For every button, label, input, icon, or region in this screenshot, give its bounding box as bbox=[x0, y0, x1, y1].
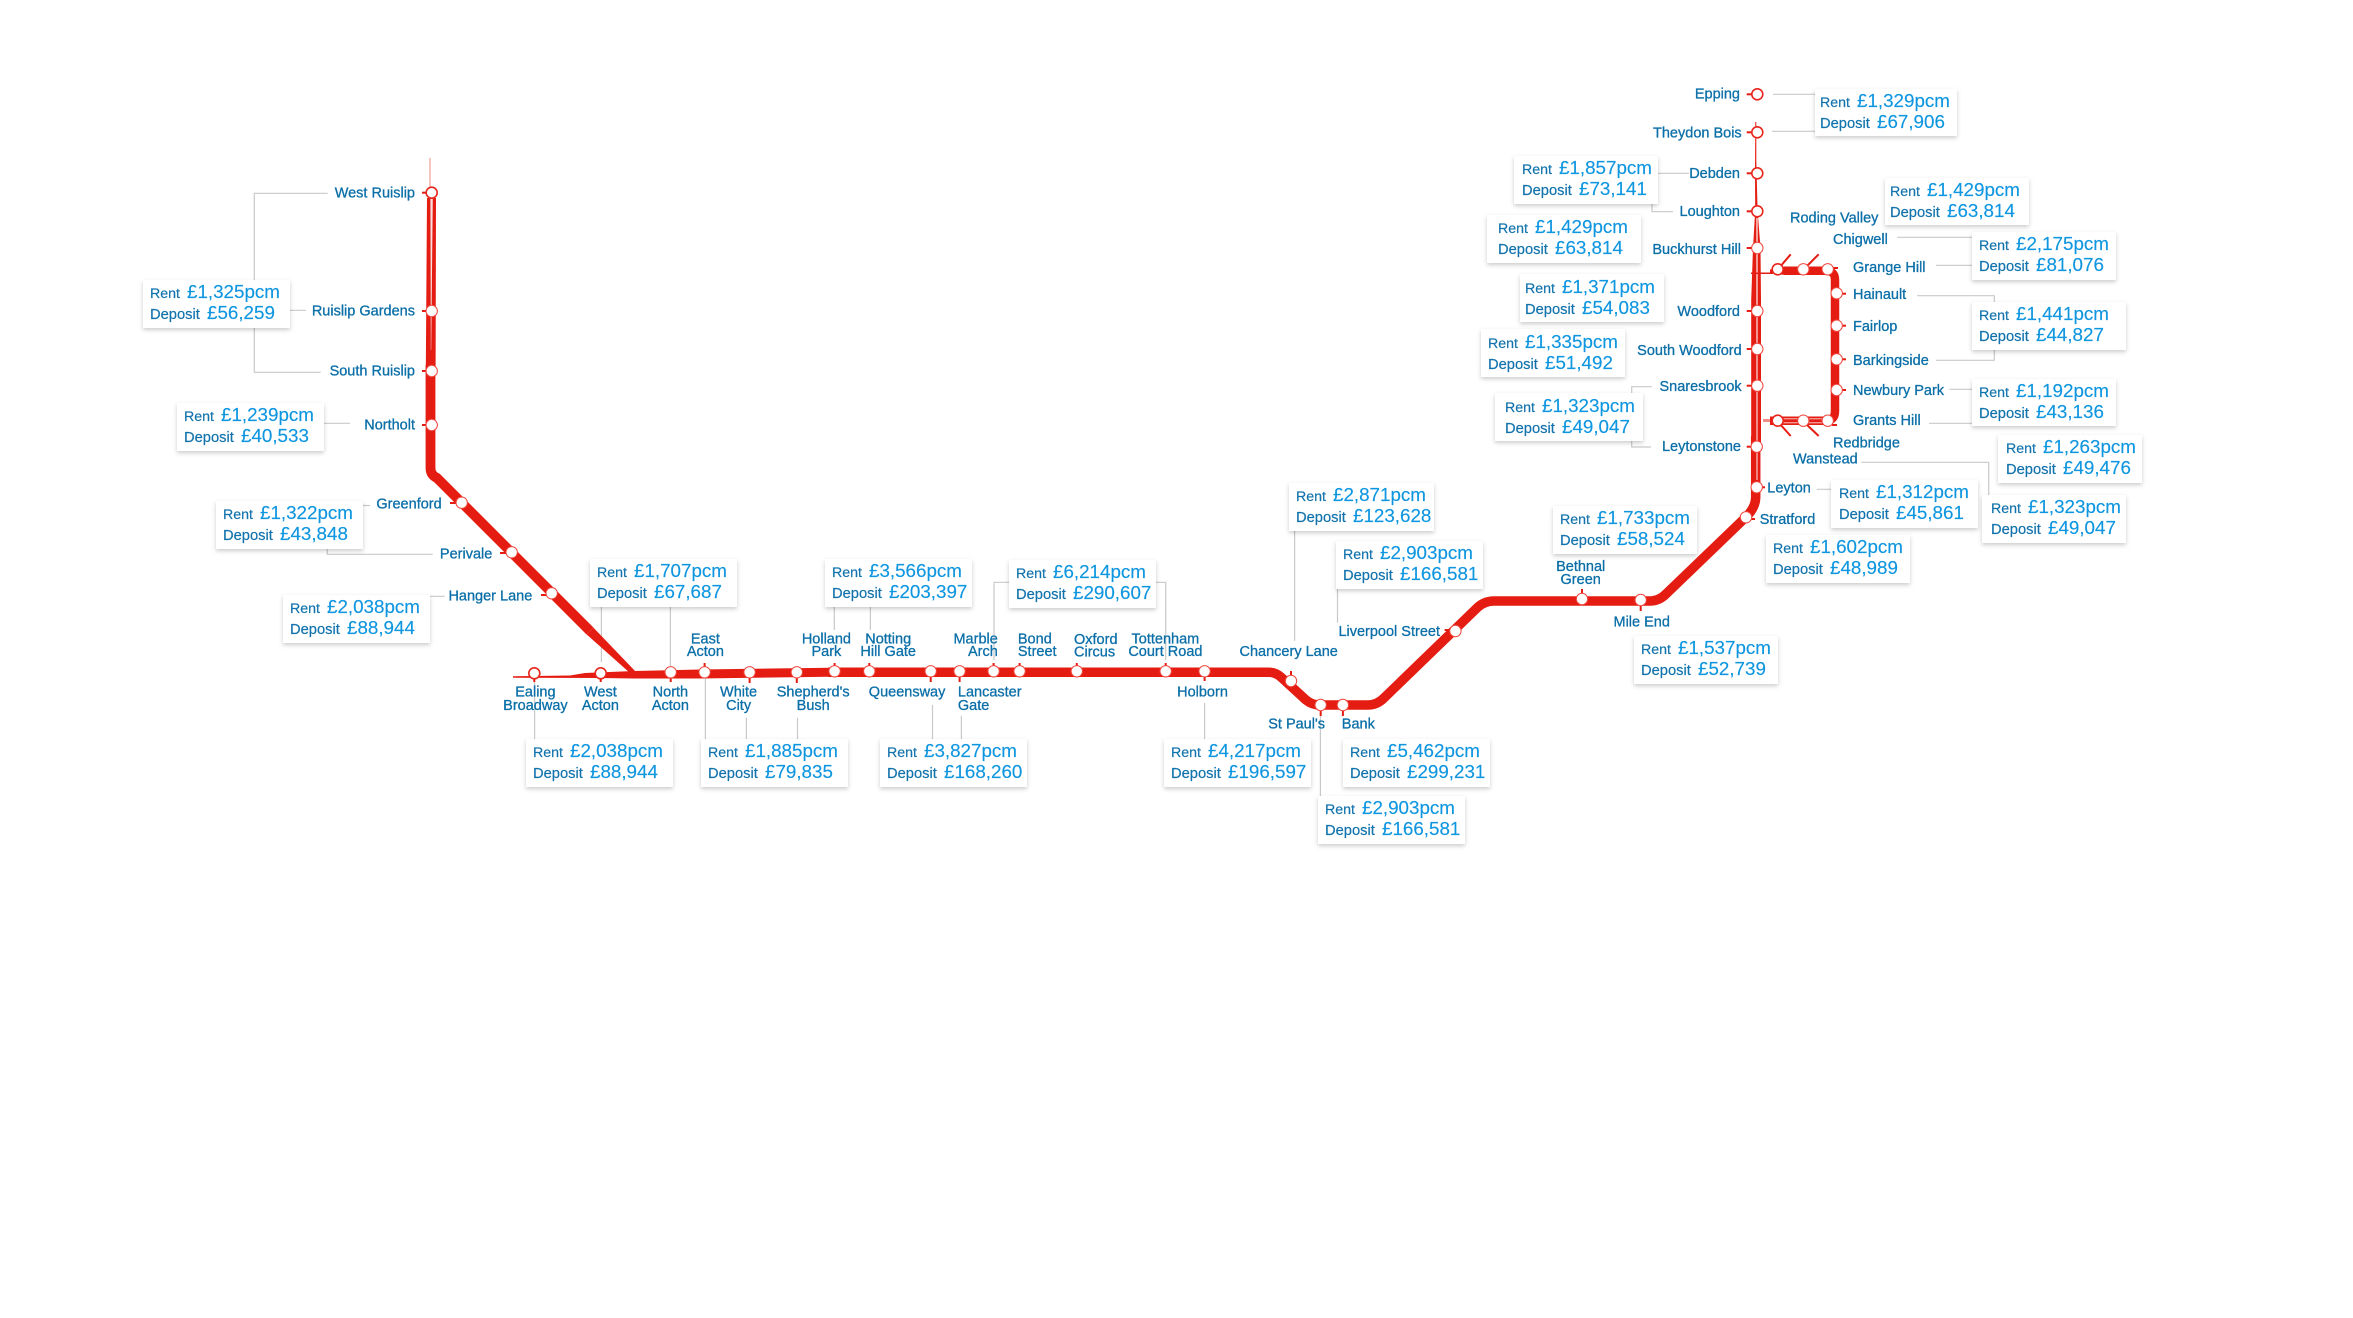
station: White City: City bbox=[726, 698, 752, 714]
station: Ealing Broadway: Ealing bbox=[515, 685, 556, 701]
card: Chancery Lane: £123,628 bbox=[1353, 505, 1431, 526]
card: Newbury Park and Grants Hill: £43,136 bbox=[2036, 401, 2104, 422]
card: Bank: £5,462pcm bbox=[1387, 740, 1480, 761]
card: Stratford bbox=[1766, 535, 1910, 583]
card: Bank bbox=[1343, 739, 1490, 787]
stations: west branch bbox=[312, 185, 557, 604]
station: Chigwell: Chigwell bbox=[1833, 232, 1888, 248]
station: Debden: Debden bbox=[1689, 166, 1740, 182]
card: Marble Arch to Tottenham Court Road: £6,214pcm bbox=[1053, 561, 1146, 582]
station: Marble Arch: Arch bbox=[968, 644, 998, 660]
station: Perivale: Perivale bbox=[440, 546, 492, 562]
card: Ealing Broadway bbox=[526, 739, 673, 787]
station: West Acton: West bbox=[584, 685, 617, 701]
station: Roding Valley bbox=[1772, 211, 1879, 275]
station: Holborn: Holborn bbox=[1177, 685, 1228, 701]
card: Ealing Broadway: £2,038pcm bbox=[570, 740, 663, 761]
station: Bank bbox=[1337, 699, 1376, 732]
card: Chancery Lane bbox=[1289, 483, 1434, 531]
card: Redbridge: £1,263pcm bbox=[2043, 436, 2136, 457]
station: Snaresbrook: Snaresbrook bbox=[1659, 379, 1742, 395]
card: Snaresbrook and Leytonstone: £1,323pcm bbox=[1542, 395, 1635, 416]
card: Bank: Deposit bbox=[1350, 766, 1400, 782]
card: Greenford and Perivale: Rent bbox=[223, 507, 253, 523]
card: Hanger Lane bbox=[283, 595, 430, 643]
card: Redbridge bbox=[1998, 435, 2142, 483]
card: Mile End: Deposit bbox=[1641, 663, 1691, 679]
card: West and North Acton: Rent bbox=[597, 565, 627, 581]
card: Epping and Theydon Bois bbox=[1815, 89, 1957, 136]
card: East Acton, White City, Shepherd's Bush: Rent bbox=[708, 745, 738, 761]
station: South Ruislip: South Ruislip bbox=[330, 363, 415, 379]
card: Newbury Park and Grants Hill bbox=[1972, 379, 2116, 426]
card: Northolt: Rent bbox=[184, 409, 214, 425]
price cards bbox=[143, 89, 2142, 844]
station: Woodford: Woodford bbox=[1677, 304, 1740, 320]
card: Leyton: £45,861 bbox=[1896, 502, 1964, 523]
station: Bank: Bank bbox=[1342, 716, 1376, 732]
station: White City: White bbox=[720, 685, 757, 701]
card: Queensway and Lancaster Gate: Deposit bbox=[887, 766, 937, 782]
station: Theydon Bois: Theydon Bois bbox=[1653, 126, 1742, 142]
central line route bbox=[426, 122, 1835, 705]
card: Northolt: £1,239pcm bbox=[221, 404, 314, 425]
station: West Ruislip: West Ruislip bbox=[335, 185, 415, 201]
card: South Woodford: Deposit bbox=[1488, 357, 1538, 373]
station: Bethnal Green: Green bbox=[1561, 572, 1601, 588]
card: East Acton, White City, Shepherd's Bush: £1,885pcm bbox=[745, 740, 838, 761]
card: Buckhurst Hill: £63,814 bbox=[1555, 237, 1623, 258]
card: Epping and Theydon Bois: Deposit bbox=[1820, 116, 1870, 132]
station: Chancery Lane bbox=[1240, 644, 1338, 687]
card: South Woodford: £1,335pcm bbox=[1525, 331, 1618, 352]
card: West and North Acton: Deposit bbox=[597, 586, 647, 602]
station: Chancery Lane: Chancery Lane bbox=[1240, 644, 1338, 660]
station: Leyton: Leyton bbox=[1767, 481, 1811, 497]
card: Wanstead: £1,323pcm bbox=[2028, 496, 2121, 517]
card: Bethnal Green bbox=[1553, 506, 1697, 554]
station: West Acton bbox=[582, 668, 619, 714]
card: St Paul's: £2,903pcm bbox=[1362, 797, 1455, 818]
card: Greenford and Perivale: £1,322pcm bbox=[260, 502, 353, 523]
card: Roding Valley: Deposit bbox=[1890, 205, 1940, 221]
station: Ealing Broadway: Broadway bbox=[503, 698, 568, 714]
card: Wanstead: Deposit bbox=[1991, 522, 2041, 538]
station: Liverpool Street: Liverpool Street bbox=[1338, 624, 1440, 640]
west ruislip branch bbox=[426, 158, 637, 673]
station: Shepherd's Bush: Bush bbox=[797, 698, 830, 714]
card: Mile End: £52,739 bbox=[1698, 658, 1766, 679]
station: Wanstead: Wanstead bbox=[1793, 452, 1858, 468]
station: Epping bbox=[1695, 86, 1763, 102]
card: Holland Park and Notting Hill Gate: £203,397 bbox=[889, 581, 967, 602]
station: Notting Hill Gate bbox=[860, 631, 916, 677]
card: Marble Arch to Tottenham Court Road: Rent bbox=[1016, 566, 1046, 582]
card: Debden and Loughton: £73,141 bbox=[1579, 178, 1647, 199]
card: Wanstead: Rent bbox=[1991, 501, 2021, 517]
card: Bethnal Green: Rent bbox=[1560, 512, 1590, 528]
card: Redbridge: Rent bbox=[2006, 441, 2036, 457]
card: Holborn: Deposit bbox=[1171, 766, 1221, 782]
station: North Acton bbox=[652, 667, 689, 714]
card: Hainault, Fairlop, Barkingside: Deposit bbox=[1979, 329, 2029, 345]
card: East Acton, White City, Shepherd's Bush bbox=[701, 739, 848, 787]
card: Liverpool Street: £2,903pcm bbox=[1380, 542, 1473, 563]
card: Mile End: £1,537pcm bbox=[1678, 637, 1771, 658]
card: Debden and Loughton bbox=[1514, 156, 1658, 204]
card: St Paul's: £166,581 bbox=[1382, 818, 1460, 839]
station: Fairlop: Fairlop bbox=[1853, 319, 1897, 335]
card: Stratford: Rent bbox=[1773, 541, 1803, 557]
station: Holland Park: Park bbox=[811, 644, 842, 660]
station: Notting Hill Gate: Notting bbox=[865, 631, 911, 647]
card: Queensway and Lancaster Gate: Rent bbox=[887, 745, 917, 761]
station: Grants Hill bbox=[1822, 413, 1921, 429]
station: St Paul's: St Paul's bbox=[1268, 716, 1325, 732]
station: Notting Hill Gate: Hill Gate bbox=[860, 644, 916, 660]
station: Tottenham Court Road bbox=[1128, 631, 1202, 677]
station: North Acton: North bbox=[653, 685, 688, 701]
card: Bank: Rent bbox=[1350, 745, 1380, 761]
card: Ealing Broadway: Deposit bbox=[533, 766, 583, 782]
card: Snaresbrook and Leytonstone: £49,047 bbox=[1562, 416, 1630, 437]
card: Mile End: Rent bbox=[1641, 642, 1671, 658]
card: Holland Park and Notting Hill Gate: Deposit bbox=[832, 586, 882, 602]
station: Grants Hill: Grants Hill bbox=[1853, 413, 1921, 429]
card: Liverpool Street: Rent bbox=[1343, 547, 1373, 563]
station: Tottenham Court Road: Tottenham bbox=[1132, 631, 1199, 647]
card: South Woodford bbox=[1481, 329, 1625, 377]
card: Stratford: £1,602pcm bbox=[1810, 536, 1903, 557]
station: South Woodford: South Woodford bbox=[1637, 343, 1742, 359]
ealing branch bbox=[513, 668, 830, 678]
station: Queensway: Queensway bbox=[869, 685, 946, 701]
station: Mile End bbox=[1613, 594, 1670, 631]
card: Chigwell and Grange Hill: Rent bbox=[1979, 238, 2009, 254]
card: East Acton, White City, Shepherd's Bush: Deposit bbox=[708, 766, 758, 782]
card: Redbridge: £49,476 bbox=[2063, 457, 2131, 478]
station: Oxford Circus bbox=[1071, 632, 1118, 677]
card: Northolt bbox=[177, 403, 324, 451]
card: Hainault, Fairlop, Barkingside: Rent bbox=[1979, 308, 2009, 324]
card: Leyton: Deposit bbox=[1839, 507, 1889, 523]
card: Buckhurst Hill: Rent bbox=[1498, 221, 1528, 237]
station: Shepherd's Bush: Shepherd's bbox=[777, 685, 850, 701]
card: Bethnal Green: Deposit bbox=[1560, 533, 1610, 549]
card: Buckhurst Hill: £1,429pcm bbox=[1535, 216, 1628, 237]
station: Northolt bbox=[364, 417, 437, 433]
card: Woodford: £1,371pcm bbox=[1562, 276, 1655, 297]
station: Redbridge bbox=[1798, 415, 1900, 452]
station: Grange Hill: Grange Hill bbox=[1853, 260, 1926, 276]
card: Hanger Lane: £2,038pcm bbox=[327, 596, 420, 617]
card: Newbury Park and Grants Hill: Rent bbox=[1979, 385, 2009, 401]
station: Lancaster Gate: Lancaster bbox=[958, 685, 1022, 701]
station: Marble Arch: Marble bbox=[953, 631, 998, 647]
card: Holborn: £4,217pcm bbox=[1208, 740, 1301, 761]
station: North Acton: Acton bbox=[652, 698, 689, 714]
card: South Woodford: £51,492 bbox=[1545, 352, 1613, 373]
card: Wanstead: £49,047 bbox=[2048, 517, 2116, 538]
card: Ruislip: £56,259 bbox=[207, 302, 275, 323]
card: Liverpool Street: Deposit bbox=[1343, 568, 1393, 584]
station: Hainault: Hainault bbox=[1853, 287, 1906, 303]
card: West and North Acton: £67,687 bbox=[654, 581, 722, 602]
card: Woodford: £54,083 bbox=[1582, 297, 1650, 318]
station: Oxford Circus: Circus bbox=[1074, 645, 1115, 661]
card: Hanger Lane: £88,944 bbox=[347, 617, 415, 638]
card: Mile End bbox=[1634, 636, 1778, 684]
card: Hainault, Fairlop, Barkingside: £44,827 bbox=[2036, 324, 2104, 345]
card: Redbridge: Deposit bbox=[2006, 462, 2056, 478]
station: White City bbox=[720, 667, 757, 714]
connector lines bbox=[254, 94, 1994, 796]
station: St Paul's bbox=[1268, 699, 1326, 732]
station: Redbridge: Redbridge bbox=[1833, 436, 1900, 452]
card: Snaresbrook and Leytonstone: Deposit bbox=[1505, 421, 1555, 437]
card: Queensway and Lancaster Gate: £3,827pcm bbox=[924, 740, 1017, 761]
card: Woodford: Rent bbox=[1525, 281, 1555, 297]
card: Woodford bbox=[1520, 274, 1664, 322]
card: Greenford and Perivale: Deposit bbox=[223, 528, 273, 544]
card: Ruislip: Rent bbox=[150, 286, 180, 302]
card: Hainault, Fairlop, Barkingside: £1,441pcm bbox=[2016, 303, 2109, 324]
card: Newbury Park and Grants Hill: £1,192pcm bbox=[2016, 380, 2109, 401]
station: Holland Park: Holland bbox=[802, 631, 851, 647]
station: Hanger Lane: Hanger Lane bbox=[448, 588, 532, 604]
card: Snaresbrook and Leytonstone bbox=[1495, 393, 1643, 441]
station: Debden bbox=[1689, 166, 1763, 182]
card: Epping and Theydon Bois: Rent bbox=[1820, 95, 1850, 111]
station: East Acton: East bbox=[691, 631, 720, 647]
epping branch bbox=[1751, 122, 1773, 480]
station: Greenford: Greenford bbox=[376, 496, 442, 512]
card: Debden and Loughton: Rent bbox=[1522, 162, 1552, 178]
station: West Acton: Acton bbox=[582, 698, 619, 714]
card: Snaresbrook and Leytonstone: Rent bbox=[1505, 400, 1535, 416]
station: Wanstead bbox=[1772, 415, 1858, 468]
card: Ruislip: Deposit bbox=[150, 307, 200, 323]
station: Epping: Epping bbox=[1695, 86, 1740, 102]
card: Holborn bbox=[1164, 739, 1311, 787]
card: Holborn: Rent bbox=[1171, 745, 1201, 761]
station: Lancaster Gate: Gate bbox=[958, 698, 989, 714]
card: Chancery Lane: Rent bbox=[1296, 489, 1326, 505]
card: Chigwell and Grange Hill bbox=[1972, 232, 2116, 280]
station: Bethnal Green: Bethnal bbox=[1556, 559, 1605, 575]
card: Ealing Broadway: £88,944 bbox=[590, 761, 658, 782]
card: West and North Acton: £1,707pcm bbox=[634, 560, 727, 581]
card: East Acton, White City, Shepherd's Bush: £79,835 bbox=[765, 761, 833, 782]
station: Newbury Park: Newbury Park bbox=[1853, 383, 1945, 399]
card: St Paul's: Rent bbox=[1325, 802, 1355, 818]
station: Ruislip Gardens: Ruislip Gardens bbox=[312, 303, 415, 319]
card: Stratford: £48,989 bbox=[1830, 557, 1898, 578]
main trunk bbox=[828, 436, 1756, 705]
station: East Acton: Acton bbox=[687, 644, 724, 660]
card: Marble Arch to Tottenham Court Road bbox=[1009, 560, 1156, 608]
card: Stratford: Deposit bbox=[1773, 562, 1823, 578]
card: Debden and Loughton: Deposit bbox=[1522, 183, 1572, 199]
card: Greenford and Perivale: £43,848 bbox=[280, 523, 348, 544]
card: Northolt: £40,533 bbox=[241, 425, 309, 446]
card: Roding Valley bbox=[1885, 178, 2029, 225]
card: Leyton bbox=[1831, 480, 1978, 528]
hainault loop bbox=[1763, 266, 1835, 423]
card: Liverpool Street: £166,581 bbox=[1400, 563, 1478, 584]
card: Roding Valley: Rent bbox=[1890, 184, 1920, 200]
station: Fairlop bbox=[1831, 319, 1897, 335]
card: Newbury Park and Grants Hill: Deposit bbox=[1979, 406, 2029, 422]
card: Liverpool Street bbox=[1336, 541, 1483, 589]
card: St Paul's: Deposit bbox=[1325, 823, 1375, 839]
card: Hainault, Fairlop, Barkingside bbox=[1972, 302, 2126, 350]
card: Hanger Lane: Deposit bbox=[290, 622, 340, 638]
station: Holland Park bbox=[802, 631, 851, 677]
card: Ruislip: £1,325pcm bbox=[187, 281, 280, 302]
card: Debden and Loughton: £1,857pcm bbox=[1559, 157, 1652, 178]
card: Buckhurst Hill bbox=[1487, 215, 1641, 263]
station: Bond Street: Street bbox=[1018, 644, 1057, 660]
card: Ruislip bbox=[143, 280, 290, 328]
station: Bethnal Green bbox=[1556, 559, 1605, 605]
station: Loughton: Loughton bbox=[1680, 204, 1740, 220]
station: Chigwell bbox=[1798, 232, 1888, 275]
card: Epping and Theydon Bois: £67,906 bbox=[1877, 111, 1945, 132]
card: Wanstead bbox=[1982, 495, 2126, 543]
station: Shepherd's Bush bbox=[777, 667, 850, 714]
card: Woodford: Deposit bbox=[1525, 302, 1575, 318]
stations: east branch bbox=[1637, 86, 1945, 528]
card: Holland Park and Notting Hill Gate: £3,566pcm bbox=[869, 560, 962, 581]
card: Bank: £299,231 bbox=[1407, 761, 1485, 782]
card: Roding Valley: £63,814 bbox=[1947, 200, 2015, 221]
station: Northolt: Northolt bbox=[364, 417, 415, 433]
station: Roding Valley: Roding Valley bbox=[1790, 211, 1879, 227]
card: Chigwell and Grange Hill: £2,175pcm bbox=[2016, 233, 2109, 254]
card: St Paul's bbox=[1318, 796, 1465, 844]
station: Leytonstone: Leytonstone bbox=[1662, 439, 1741, 455]
stations: central section bbox=[503, 559, 1670, 732]
station: Bond Street bbox=[1014, 631, 1057, 677]
card: Hanger Lane: Rent bbox=[290, 601, 320, 617]
card: Marble Arch to Tottenham Court Road: Deposit bbox=[1016, 587, 1066, 603]
card: Buckhurst Hill: Deposit bbox=[1498, 242, 1548, 258]
card: Chancery Lane: Deposit bbox=[1296, 510, 1346, 526]
station: Marble Arch bbox=[953, 631, 999, 677]
station: Oxford Circus: Oxford bbox=[1074, 632, 1118, 648]
card: Roding Valley: £1,429pcm bbox=[1927, 179, 2020, 200]
card: Queensway and Lancaster Gate: £168,260 bbox=[944, 761, 1022, 782]
station: Bond Street: Bond bbox=[1018, 631, 1052, 647]
card: Ealing Broadway: Rent bbox=[533, 745, 563, 761]
station: East Acton bbox=[687, 631, 724, 678]
station: Holborn bbox=[1177, 666, 1228, 701]
station: Tottenham Court Road: Court Road bbox=[1128, 644, 1202, 660]
card: Holborn: £196,597 bbox=[1228, 761, 1306, 782]
station: Buckhurst Hill: Buckhurst Hill bbox=[1652, 242, 1741, 258]
station: Mile End: Mile End bbox=[1613, 615, 1670, 631]
card: Chancery Lane: £2,871pcm bbox=[1333, 484, 1426, 505]
card: Holland Park and Notting Hill Gate bbox=[825, 559, 972, 607]
card: Chigwell and Grange Hill: £81,076 bbox=[2036, 254, 2104, 275]
card: Northolt: Deposit bbox=[184, 430, 234, 446]
card: Bethnal Green: £1,733pcm bbox=[1597, 507, 1690, 528]
card: Holland Park and Notting Hill Gate: Rent bbox=[832, 565, 862, 581]
card: Greenford and Perivale bbox=[216, 501, 363, 549]
station: Stratford: Stratford bbox=[1760, 512, 1815, 528]
card: Queensway and Lancaster Gate bbox=[880, 739, 1027, 787]
station: Barkingside: Barkingside bbox=[1853, 353, 1929, 369]
card: Leyton: Rent bbox=[1839, 486, 1869, 502]
card: Chigwell and Grange Hill: Deposit bbox=[1979, 259, 2029, 275]
card: West and North Acton bbox=[590, 559, 737, 607]
card: Epping and Theydon Bois: £1,329pcm bbox=[1857, 90, 1950, 111]
station: Queensway bbox=[869, 666, 946, 701]
card: South Woodford: Rent bbox=[1488, 336, 1518, 352]
station: Ealing Broadway bbox=[503, 668, 568, 714]
card: Bethnal Green: £58,524 bbox=[1617, 528, 1685, 549]
station: Lancaster Gate bbox=[954, 666, 1022, 714]
station: Perivale bbox=[440, 546, 517, 562]
card: Leyton: £1,312pcm bbox=[1876, 481, 1969, 502]
card: Marble Arch to Tottenham Court Road: £290,607 bbox=[1073, 582, 1151, 603]
